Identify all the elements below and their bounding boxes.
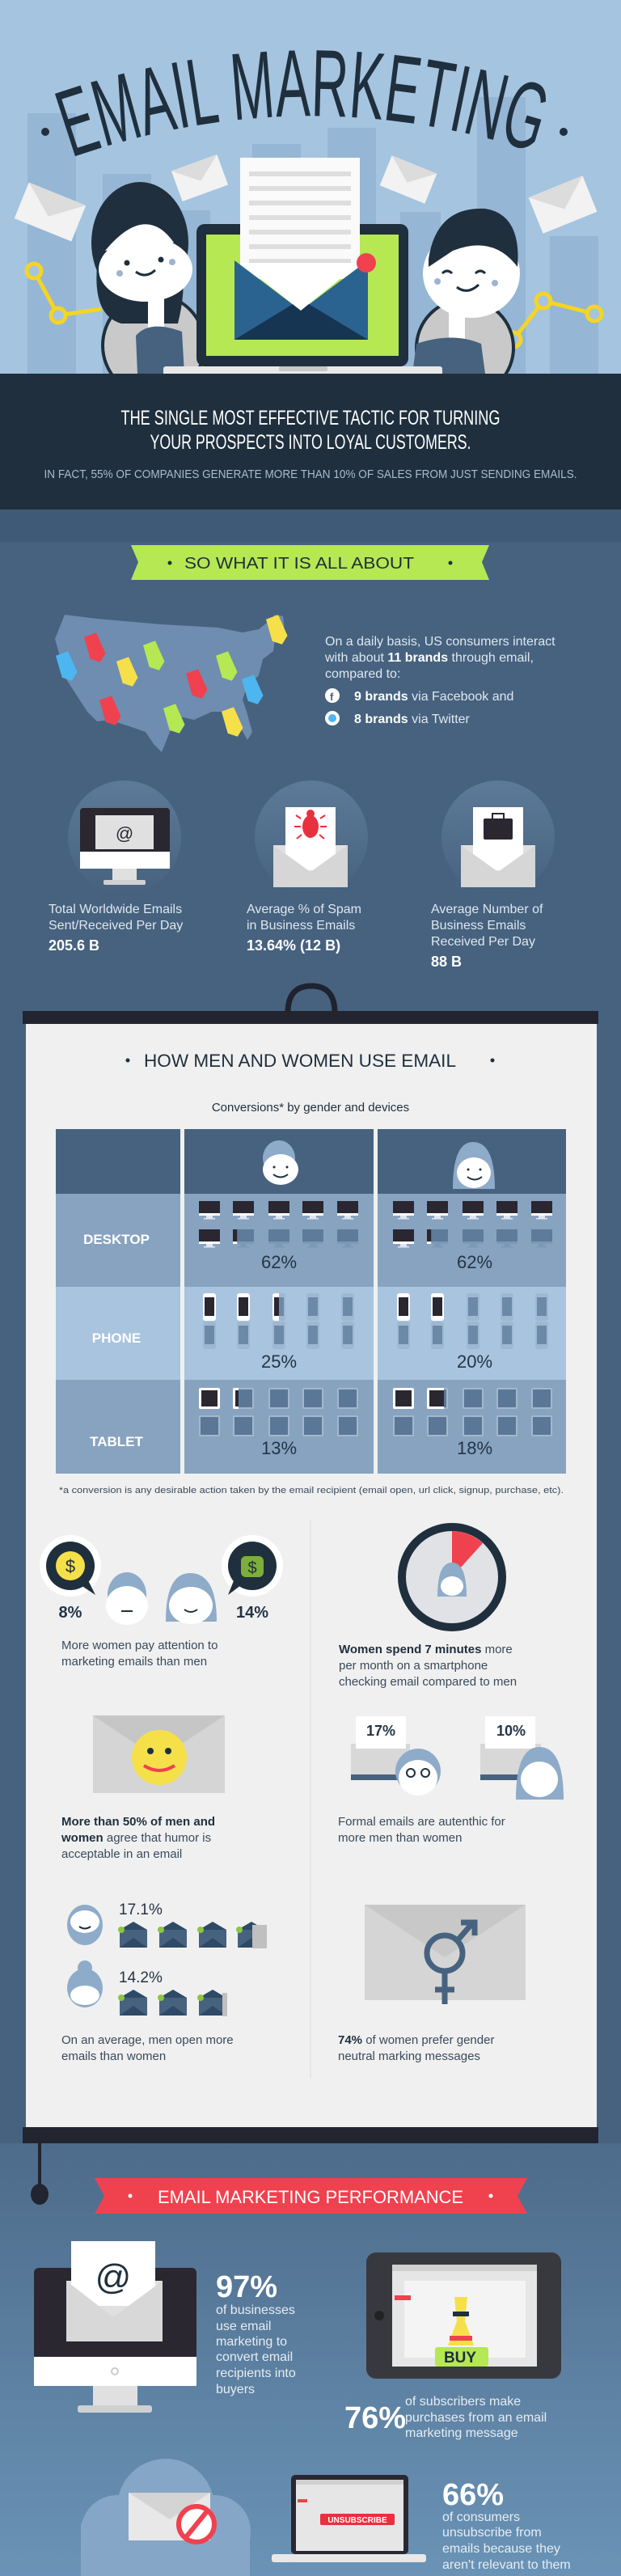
stat: women spend 7 minutes: checking email compared to men <box>339 1675 517 1689</box>
stat: 97% businesses: 97% <box>216 2270 277 2304</box>
stat: formal emails: 17% <box>366 1723 395 1739</box>
text: daily brand interaction <box>324 635 556 726</box>
text: daily brand interaction: with about 11 brands through email, <box>324 651 534 665</box>
tagline band: IN FACT, 55% OF COMPANIES GENERATE MORE THAN 10% OF SALES FROM JUST SENDING EMAILS. <box>44 467 577 481</box>
stat: 76% subscribers <box>344 2252 561 2440</box>
subtitle: Conversions* by gender and devices <box>212 1101 409 1115</box>
tablet icons women <box>393 1388 552 1436</box>
stat: 97% businesses: buyers <box>216 2383 255 2396</box>
stat: total worldwide emails: Total Worldwide Emails <box>49 903 182 916</box>
stat: women pay attention: 8% <box>59 1604 82 1622</box>
table: conversions by device: DESKTOP <box>83 1232 150 1247</box>
stat: gender neutral messages: neutral marking messages <box>338 2049 480 2063</box>
footnote: *a conversion is any desirable action taken by the email recipient (email open, url click, signup, purchase, etc). <box>59 1486 564 1495</box>
panel: how men and women use email <box>26 1024 597 2127</box>
stat: 66% unsubscribe: aren't relevant to them <box>442 2558 571 2572</box>
table: conversions by device: 13% <box>261 1438 297 1458</box>
ribbon: email marketing performance: EMAIL MARKETING PERFORMANCE <box>158 2187 463 2207</box>
stat: women pay attention: More women pay attention to <box>61 1639 218 1652</box>
stat: 97% businesses <box>34 2241 296 2413</box>
phone icons men <box>203 1293 354 1349</box>
text: daily brand interaction: 8 brands via Twitter <box>354 713 471 726</box>
stat: humor acceptable <box>61 1715 225 1861</box>
heading: how men and women use email: HOW MEN AND WOMEN USE EMAIL <box>144 1051 456 1071</box>
stat: business emails per day: Average Number of <box>431 903 543 916</box>
stat: spam percentage: Average % of Spam <box>247 903 361 916</box>
stat: 66% unsubscribe: emails because they <box>442 2542 560 2556</box>
stat: 76% subscribers: 76% <box>344 2401 406 2435</box>
stat: gender neutral messages: 74% of women prefer gender <box>338 2033 494 2047</box>
stat: 66% unsubscribe <box>272 2475 571 2572</box>
stat: humor acceptable: women agree that humor is <box>61 1831 211 1845</box>
stat: spam percentage <box>247 780 368 954</box>
woman character <box>91 182 205 396</box>
stat: men open more emails: 14.2% <box>119 1969 163 1986</box>
title <box>41 50 568 157</box>
desktop icons women <box>393 1201 552 1247</box>
icon: yellow graph lines <box>27 264 602 347</box>
stat: men open more emails: 17.1% <box>119 1901 163 1918</box>
stat: 76% subscribers: BUY <box>444 2350 476 2367</box>
stat: 97% businesses: convert email <box>216 2350 293 2364</box>
stat: formal emails: more men than women <box>338 1831 462 1845</box>
stat: women spend 7 minutes: Women spend 7 minutes more <box>339 1643 513 1656</box>
title: EMAIL MARKETING <box>55 50 546 157</box>
tablet icons men <box>199 1388 358 1436</box>
ribbon: email marketing performance <box>95 2178 527 2214</box>
icon: flying envelopes <box>15 154 597 241</box>
table: conversions by device: 62% <box>457 1252 492 1272</box>
stat: 97% businesses: of businesses <box>216 2303 295 2317</box>
stat: women spend 7 minutes <box>339 1527 517 1689</box>
stat: spam percentage: in Business Emails <box>247 919 355 933</box>
stat: 76% subscribers: of subscribers make <box>405 2395 521 2409</box>
table: conversions by device: 18% <box>457 1438 492 1458</box>
stat: 97% businesses: @ <box>95 2257 131 2297</box>
table: conversions by device: 20% <box>457 1351 492 1372</box>
panel hanger <box>23 986 598 1024</box>
stat: 97% businesses: recipients into <box>216 2367 296 2380</box>
stat: business emails per day: Business Emails <box>431 919 526 933</box>
stat: formal emails: 10% <box>496 1723 526 1739</box>
stat: women spend 7 minutes: per month on a smartphone <box>339 1659 488 1673</box>
table: conversions by device: TABLET <box>90 1434 144 1449</box>
stat: women pay attention: 14% <box>236 1604 268 1622</box>
phone icons women <box>397 1293 548 1349</box>
stat: men open more emails: emails than women <box>61 2049 166 2063</box>
stat: formal emails <box>338 1716 564 1845</box>
stat: women pay attention: $ <box>247 1559 257 1577</box>
hanging pin <box>31 2143 49 2205</box>
stat: gender neutral messages <box>338 1905 526 2063</box>
stat: total worldwide emails <box>49 780 183 954</box>
table: conversions by device: 25% <box>261 1351 297 1372</box>
stat: total worldwide emails: Sent/Received Per Day <box>49 919 183 933</box>
tagline band: YOUR PROSPECTS INTO LOYAL CUSTOMERS. <box>150 431 471 454</box>
performance section background <box>0 2143 621 2576</box>
stat: 66% unsubscribe: unsubscribe from <box>442 2526 542 2540</box>
stat: 76% subscribers: purchases from an email <box>405 2411 547 2425</box>
stat: humor acceptable: More than 50% of men and <box>61 1815 215 1829</box>
laptop with envelope <box>163 158 442 381</box>
header background <box>0 0 621 374</box>
text: daily brand interaction: On a daily basis, US consumers interact <box>325 635 556 649</box>
stat: spam percentage: 13.64% (12 B) <box>247 937 340 954</box>
icon: cloud with blocked envelope <box>81 2459 251 2576</box>
man character <box>412 209 520 396</box>
stat: 66% unsubscribe: 66% <box>442 2478 504 2512</box>
text: daily brand interaction: compared to: <box>325 667 400 681</box>
stat: business emails per day: Received Per Day <box>431 935 535 949</box>
stat: women pay attention <box>40 1535 283 1669</box>
map: US with brand tags <box>54 615 289 752</box>
table: conversions by device: PHONE <box>92 1330 141 1346</box>
tagline band <box>0 374 621 510</box>
stat: business emails per day <box>431 780 555 970</box>
stat: total worldwide emails: @ <box>116 823 133 844</box>
stat: business emails per day: 88 B <box>431 954 462 970</box>
text: daily brand interaction: f <box>330 691 334 703</box>
stat: formal emails: Formal emails are autenthic for <box>338 1815 505 1829</box>
stat: 97% businesses: marketing to <box>216 2335 287 2349</box>
desktop icons men <box>199 1201 358 1247</box>
icon: woman face <box>453 1142 495 1189</box>
stat: men open more emails: On an average, men open more <box>61 2033 234 2047</box>
stat: men open more emails <box>61 1901 267 2063</box>
stat: 76% subscribers: marketing message <box>405 2426 518 2440</box>
table: conversions by device <box>56 1129 566 1474</box>
ribbon: so what it is all about <box>131 545 489 580</box>
stat: humor acceptable: acceptable in an email <box>61 1847 182 1861</box>
table: conversions by device: 62% <box>261 1252 297 1272</box>
stat: 66% unsubscribe: of consumers <box>442 2510 520 2524</box>
stat: 97% businesses: use email <box>216 2320 271 2333</box>
stat: total worldwide emails: 205.6 B <box>49 937 99 954</box>
stat: women pay attention: marketing emails than men <box>61 1655 207 1669</box>
stat: women pay attention: $ <box>65 1556 75 1576</box>
icon: man face <box>263 1140 298 1185</box>
stat: 66% unsubscribe: UNSUBSCRIBE <box>327 2516 387 2525</box>
ribbon: so what it is all about: SO WHAT IT IS ALL ABOUT <box>184 555 414 573</box>
text: daily brand interaction: 9 brands via Facebook and <box>354 690 513 704</box>
